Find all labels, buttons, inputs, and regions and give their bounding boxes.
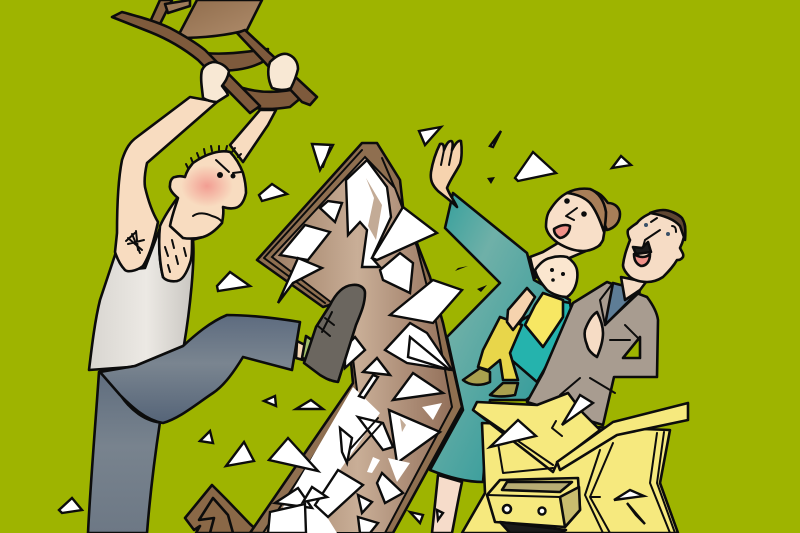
hair bbox=[650, 210, 685, 240]
frame bevel bbox=[264, 150, 402, 303]
fist right bbox=[268, 54, 298, 90]
neck bbox=[621, 277, 646, 300]
sock and ankle bbox=[296, 341, 305, 360]
lower drawer bbox=[500, 522, 566, 533]
shoe bbox=[304, 285, 365, 382]
standing leg bbox=[88, 360, 200, 533]
desk shards bbox=[490, 420, 536, 447]
top right lid bbox=[557, 403, 688, 470]
top panel bbox=[473, 393, 600, 472]
desk body bbox=[462, 423, 678, 533]
curved stretchers bbox=[205, 49, 268, 70]
lapel lines bbox=[560, 283, 640, 395]
chair back slats bbox=[150, 0, 172, 24]
baby legs bbox=[478, 317, 522, 380]
baby bbox=[463, 256, 577, 396]
blazer gap bbox=[623, 337, 640, 358]
frame fragment bottom left bbox=[185, 485, 260, 533]
baby body bbox=[525, 293, 563, 347]
chair seat bbox=[177, 0, 262, 38]
man with moustache bbox=[527, 210, 685, 425]
raised thigh bbox=[100, 315, 300, 423]
blush bbox=[181, 165, 233, 207]
raised hand bbox=[431, 141, 462, 207]
dress bbox=[430, 193, 570, 482]
broken mirror arrow bbox=[185, 143, 462, 533]
boot bbox=[296, 285, 365, 382]
mirror surface bbox=[263, 157, 452, 533]
woman head bbox=[546, 189, 605, 251]
head bbox=[170, 151, 246, 239]
raised arm bbox=[115, 97, 217, 271]
head bbox=[623, 211, 685, 282]
hair stubble bbox=[186, 146, 241, 168]
woman hair bbox=[567, 189, 606, 232]
torso skin bbox=[159, 197, 222, 281]
shattered glass bbox=[268, 160, 462, 533]
baby shoes bbox=[463, 368, 490, 385]
woman leg bbox=[432, 475, 462, 533]
blazer bbox=[527, 282, 658, 425]
neck bbox=[530, 215, 600, 278]
desk lines bbox=[473, 410, 675, 533]
chair leg right bbox=[237, 30, 317, 105]
raised chair bbox=[112, 0, 317, 113]
woman's hand holding baby bbox=[507, 288, 535, 330]
angry face bbox=[193, 160, 241, 222]
hand on chest bbox=[585, 312, 603, 357]
face bbox=[643, 218, 676, 247]
baby sling bbox=[500, 300, 573, 382]
woman body bbox=[430, 141, 570, 533]
fist left bbox=[201, 62, 229, 102]
drawer bbox=[487, 478, 580, 527]
bun bbox=[590, 190, 620, 230]
tank top bbox=[89, 228, 193, 370]
woman face bbox=[566, 208, 577, 220]
baby face bbox=[550, 268, 554, 272]
armpit hair bbox=[126, 231, 186, 272]
baby head bbox=[535, 256, 577, 297]
shirt bbox=[605, 283, 640, 325]
flying glass shards bbox=[59, 127, 631, 523]
mirror frame bbox=[250, 143, 462, 533]
woman head group bbox=[530, 189, 620, 278]
broken yellow desk bbox=[462, 393, 688, 533]
man bbox=[88, 97, 300, 533]
chair leg long bbox=[112, 12, 260, 113]
arm behind head bbox=[230, 110, 276, 162]
